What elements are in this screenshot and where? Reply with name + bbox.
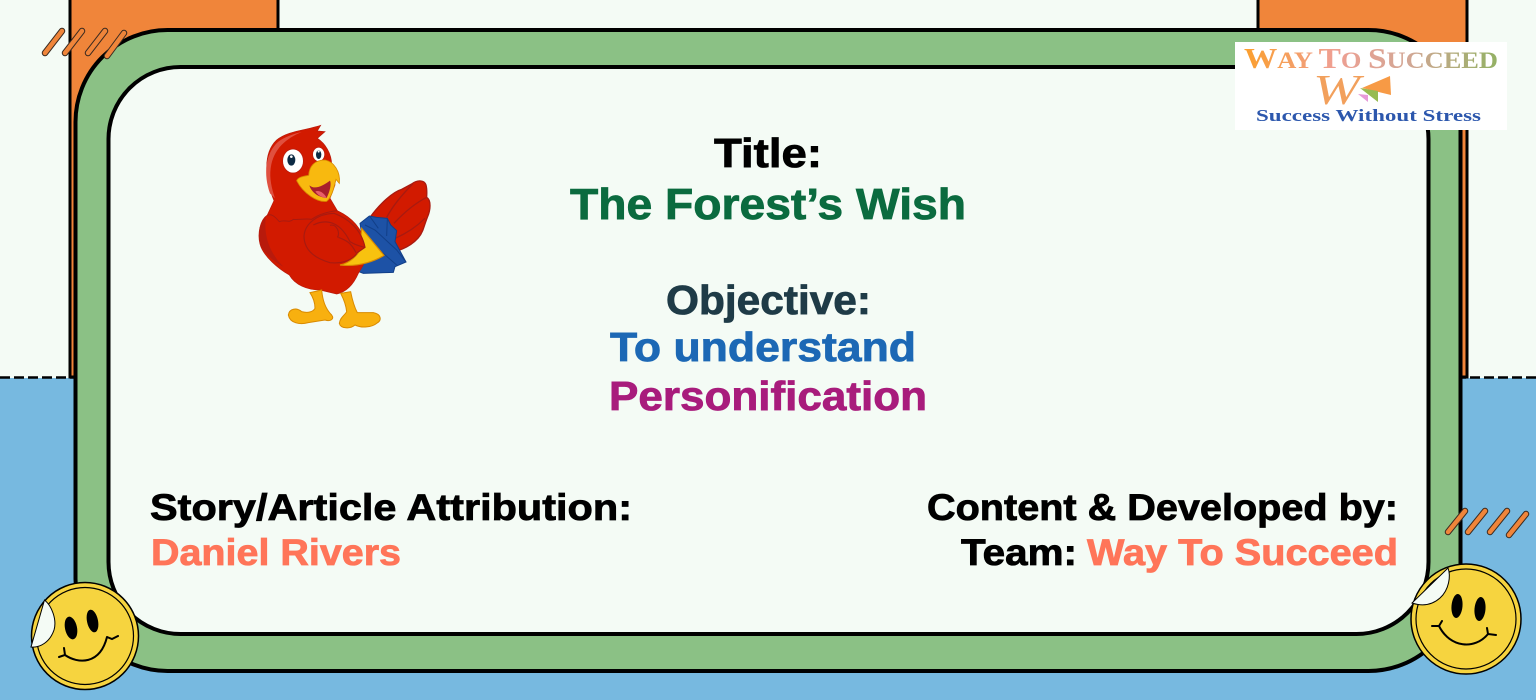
logo tagline: Success Without Stress: [1256, 106, 1482, 125]
story title: The Forest’s Wish: [570, 180, 966, 229]
team label: Team:: [961, 532, 1077, 573]
right smiley peeled corner: [1412, 568, 1449, 605]
background: lower blue area: [0, 378, 1536, 700]
attribution block: [150, 487, 632, 573]
right smiley eyes: [1450, 594, 1464, 618]
credits label: Content & Developed by:: [927, 487, 1398, 528]
parrot neck ruff: [267, 211, 337, 222]
right smiley mouth: [1432, 621, 1496, 644]
objective line one: To understand: [610, 324, 916, 370]
logo: Way To Succeed: [1235, 42, 1507, 130]
orange tab: right: [1258, 0, 1467, 377]
parrot body and head: [259, 125, 365, 294]
logo emblem: W: [1313, 68, 1365, 114]
objective label: Objective:: [666, 277, 871, 323]
left smiley peeled corner: [31, 600, 55, 647]
orange tab: left: [70, 0, 278, 377]
parrot wing: [304, 213, 384, 265]
author name: Daniel Rivers: [151, 532, 401, 573]
objective block: [609, 277, 927, 419]
inner content card: [108, 67, 1428, 634]
parrot eyes: [283, 147, 325, 173]
title block: [570, 130, 966, 229]
left smiley mouth: [59, 636, 118, 661]
credits block: [927, 487, 1398, 573]
background: upper pale area: [0, 0, 1536, 378]
illustration: red parrot: [259, 125, 430, 328]
logo emblem: [1313, 68, 1391, 114]
parrot beak: [297, 160, 340, 201]
logo wordmark: WAY TO SUCCEED: [1244, 43, 1498, 75]
sticker: right smiley: [1411, 564, 1521, 674]
title label: Title:: [714, 130, 822, 176]
objective line two: Personification: [609, 373, 927, 419]
sticker: left smiley: [31, 582, 138, 690]
parrot far tail feathers: [370, 181, 430, 252]
attribution label: Story/Article Attribution:: [150, 487, 632, 528]
left smiley eyes: [63, 616, 79, 640]
decorative slashes: bottom right: [1448, 511, 1526, 535]
decorative slashes: top left: [45, 31, 124, 56]
team name: Way To Succeed: [1087, 532, 1398, 573]
parrot blue tail: [342, 216, 406, 273]
parrot legs and feet: [288, 290, 380, 328]
